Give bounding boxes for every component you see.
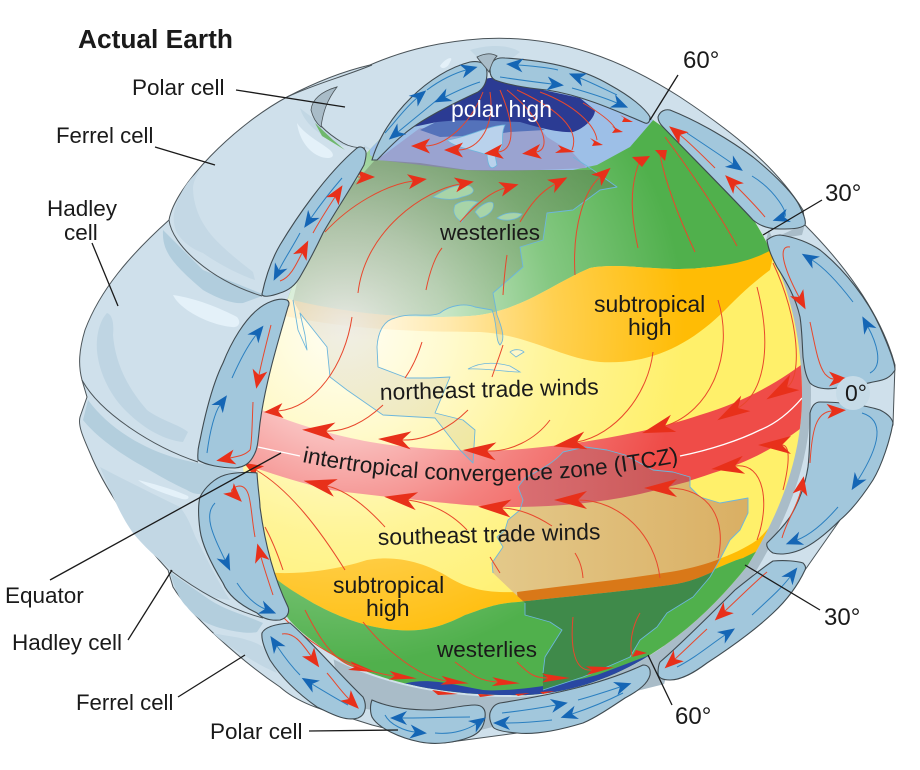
south subtropical high [275, 528, 769, 630]
label: polar high: polar high [451, 96, 552, 122]
sunlight glow [243, 147, 670, 644]
south westerlies green zone [277, 552, 756, 696]
grey gap between globe and cells [340, 245, 806, 725]
panel: Hadley cell upper right [767, 235, 895, 389]
panel: polar cell top right [490, 58, 650, 123]
top pole cap [477, 54, 497, 72]
label: 60 degrees south: 60° [675, 703, 711, 730]
North America land [293, 160, 617, 463]
wind arrows: northern westerlies [325, 137, 737, 295]
label: 60 degrees south [648, 655, 711, 730]
Caribbean islands [468, 350, 524, 372]
polar ice region [370, 78, 654, 170]
label: Hadley cell bottom: Hadley cell [12, 630, 122, 655]
panel: Hadley cell left upper [198, 299, 289, 468]
label: Ferrel cell top: Ferrel cell [56, 123, 153, 148]
label: 0 degrees: 0° [845, 380, 867, 406]
polar land [377, 128, 587, 171]
label: Equator [5, 453, 281, 608]
label: Equator: Equator [5, 583, 84, 608]
wind arrows: southeast trades and ITCZ [256, 445, 788, 578]
label: southern westerlies: westerlies [436, 637, 537, 662]
label: northern westerlies: westerlies [439, 220, 540, 245]
wind arrows: southern westerlies [283, 610, 647, 697]
south polar dark blue [404, 655, 650, 696]
label: Ferrel cell bottom [76, 655, 245, 715]
label: Hadley cell top [47, 196, 118, 306]
label: northern subtropical high [594, 291, 705, 340]
label: 30 degrees south [745, 565, 860, 631]
label: Ferrel cell top [56, 123, 215, 165]
label: Hadley cell top: cell [64, 220, 98, 245]
wind arrows: polar [425, 90, 633, 153]
Great Lakes [433, 185, 522, 222]
label: intertropical convergence zone: intertropical convergence zone (ITCZ) [304, 446, 677, 486]
label: northern subtropical high: subtropical [594, 291, 705, 317]
North America coast [293, 157, 617, 463]
South America coast [492, 447, 748, 690]
intertropical convergence zone band [240, 362, 805, 507]
label: southern subtropical high: subtropical [333, 572, 444, 598]
arctic ice patch [447, 125, 505, 168]
label: southeast trade winds: southeast trade winds [377, 518, 601, 550]
panel: Hadley cell left lower [198, 472, 289, 620]
globe [243, 78, 802, 696]
panel: Ferrel cell left upper [262, 147, 366, 296]
north subtropical high [280, 248, 775, 362]
medium blue band under polar high [420, 120, 545, 137]
panel: Ferrel cell upper right [658, 110, 805, 229]
label: polar cell top: Polar cell [132, 75, 225, 100]
label: Hadley cell top: Hadley [47, 196, 118, 221]
equator line [258, 398, 802, 456]
panel: Hadley cell lower right [767, 402, 893, 554]
label: 30 degrees north: 30° [825, 180, 861, 207]
panel: polar cell bottom left [370, 700, 485, 743]
label: northern subtropical high: high [628, 314, 671, 340]
South America land [492, 448, 748, 690]
equator mask circle 0 degrees [836, 376, 870, 410]
label: southern subtropical high [333, 572, 444, 621]
panel: polar cell bottom right [490, 665, 650, 733]
label: Ferrel cell bottom: Ferrel cell [76, 690, 173, 715]
panel: Ferrel cell lower right [658, 561, 806, 680]
north westerlies green zone [288, 78, 769, 317]
label: 60 degrees north: 60° [683, 47, 719, 74]
label: polar cell top [132, 75, 345, 107]
label: southern subtropical high: high [366, 595, 409, 621]
yellow tropics base [230, 60, 820, 710]
label: Polar cell bottom: Polar cell [210, 719, 303, 744]
polar high dark cap [414, 78, 595, 132]
panel: polar cell top left [372, 62, 487, 160]
label: 60 degrees north [650, 47, 719, 120]
panel: Ferrel cell lower left [262, 623, 365, 719]
label: 30 degrees south: 30° [824, 604, 860, 631]
label: northeast trade winds: northeast trade winds [379, 373, 599, 405]
label: 30 degrees north [763, 180, 861, 235]
title: Actual Earth [78, 24, 233, 54]
wind arrows: northeast trades [278, 263, 796, 451]
label: Hadley cell bottom [12, 570, 172, 655]
